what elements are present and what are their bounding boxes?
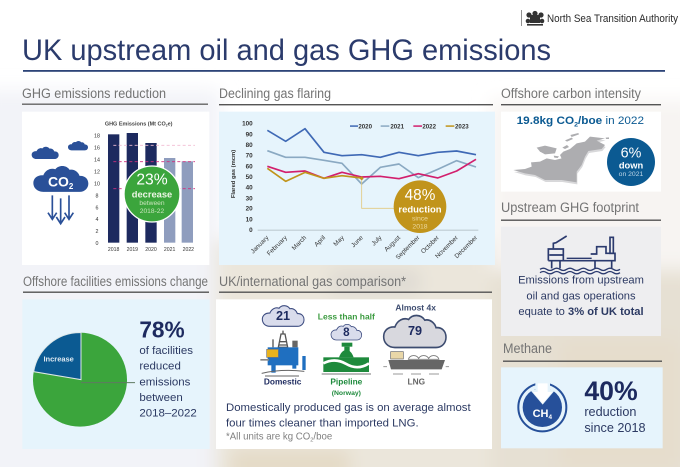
line chart: flared gas (231, 121, 479, 261)
footnote: *All units are kg CO (226, 432, 310, 443)
icon: offshore platform (540, 236, 620, 274)
callout: 6% down: down (619, 160, 643, 170)
icon: CO2 cloud with arrows (33, 166, 88, 224)
bar chart: GHG emissions: 12 (94, 169, 100, 175)
domestic column (260, 306, 306, 387)
icon: small clouds (32, 141, 88, 159)
text: footprint statement: Emissions from upstream (518, 274, 644, 286)
callout: 48% reduction: since (412, 216, 428, 223)
stat: 40% reduction: reduction (584, 405, 636, 419)
callout: 23% decrease (124, 166, 180, 222)
LNG column: LNG (408, 377, 425, 387)
icon: oil rig (260, 331, 306, 376)
panel: Upstream GHG footprint (501, 227, 661, 336)
stat: 40% reduction: 40% (584, 376, 638, 406)
panel: Methane (501, 367, 663, 448)
pipeline column: Less than half (318, 312, 375, 322)
bar chart: GHG emissions: 2 (166, 124, 168, 128)
icon: CO2 cloud with arrows: 2 (69, 182, 74, 191)
callout: 48% reduction: reduction (398, 204, 442, 215)
callout: 48% reduction: 48% (405, 187, 436, 204)
panel: Offshore facilities emissions change (22, 299, 210, 449)
line chart: flared gas: May (332, 234, 346, 248)
heading: Offshore carbon intensity: Offshore carbon intensity (501, 86, 642, 102)
panel: UK/international gas comparison (216, 299, 492, 449)
callout: 23% decrease: decrease (132, 190, 172, 200)
bar chart: GHG emissions: GHG Emissions (Mt CO (105, 122, 166, 128)
callout: 23% decrease: 2018-22 (140, 208, 165, 215)
stat: 78% (139, 317, 197, 420)
icon: CO2 cloud with arrows: CO (48, 173, 69, 189)
title: UK upstream oil and gas GHG emissions (22, 34, 551, 67)
bar chart: GHG emissions: 6 (96, 205, 99, 211)
stat: 78%: emissions (139, 376, 191, 388)
callout: 6% down: on 2021 (619, 171, 644, 178)
LNG column: 79 (408, 324, 422, 338)
line chart: flared gas: December (453, 234, 479, 260)
heading: Methane: Methane (503, 341, 552, 357)
bar chart: GHG emissions: 10 (94, 181, 100, 187)
legend (350, 123, 469, 130)
pipeline column: 8 (343, 326, 350, 339)
heading: Declining gas flaring: Declining gas flaring (219, 86, 331, 102)
stat: 78%: of facilities (139, 345, 193, 357)
stat: 78%: reduced (139, 361, 181, 373)
bar chart: GHG emissions: 2019 (127, 247, 138, 253)
icon: CH4 down arrow: CH (533, 408, 549, 420)
line chart: flared gas: 20 (246, 206, 253, 213)
footnote: 2 (310, 438, 313, 444)
line chart: flared gas: August (383, 234, 402, 253)
domestic column: Domestic (264, 377, 302, 387)
callout: 23% decrease: 23% (136, 171, 168, 188)
panel: Declining gas flaring (219, 112, 495, 265)
callout: 23% decrease: between (139, 200, 165, 207)
stat: carbon intensity: 2 (574, 121, 578, 128)
line chart: flared gas: 40 (246, 185, 253, 192)
LNG column (383, 303, 449, 387)
text: footprint statement: oil and gas operations (526, 290, 636, 302)
footnote: /boe (313, 432, 332, 443)
bar chart: GHG emissions: 2018 (108, 247, 120, 253)
pie chart: facilities: Increase (43, 355, 74, 364)
callout: 48% reduction (394, 180, 446, 233)
stat: 78%: between (139, 392, 183, 404)
text: comparison statement: four times cleaner than imported LNG. (226, 417, 419, 429)
icon: CH4 down arrow (518, 381, 566, 431)
heading: Offshore facilities emissions change: Offshore facilities emissions change (23, 274, 208, 290)
bar chart: GHG emissions: 4 (96, 217, 99, 223)
stat: 78%: 2018–2022 (139, 408, 197, 420)
bar chart: GHG emissions: 8 (96, 193, 99, 199)
icon: royal crest (526, 11, 544, 26)
legend: 2020 (358, 123, 373, 130)
line chart: flared gas: April (313, 234, 327, 248)
heading: Upstream GHG footprint: Upstream GHG footprint (501, 200, 639, 216)
line chart: flared gas: 0 (249, 227, 253, 234)
line chart: flared gas: October (420, 234, 441, 255)
bar chart: GHG emissions: 0 (96, 241, 99, 247)
pie chart: facilities (33, 333, 135, 427)
callout: 6% down: 6% (621, 145, 642, 161)
legend: 2023 (455, 123, 469, 130)
bar chart: GHG emissions: 2020 (145, 247, 157, 253)
line chart: flared gas: 100 (242, 121, 253, 128)
panel: Offshore carbon intensity (501, 112, 661, 192)
line chart: flared gas: November (434, 234, 460, 260)
line chart: flared gas: 50 (246, 174, 253, 181)
line chart: flared gas: Flared gas (mcm) (231, 150, 237, 198)
text: footprint statement: equate to 3% of UK total (518, 306, 644, 318)
pipeline column: (Norway) (332, 390, 361, 397)
line chart: flared gas: 90 (246, 131, 253, 138)
line chart: flared gas: January (250, 234, 271, 255)
bar chart: GHG emissions: 2 (96, 229, 99, 235)
line chart: flared gas: July (370, 234, 384, 247)
text: footprint statement (518, 274, 644, 318)
callout: 48% reduction: 2018 (412, 224, 428, 231)
line chart: flared gas: September (395, 234, 421, 261)
icon: LNG tanker (383, 352, 449, 374)
stat: 40% reduction (584, 376, 646, 435)
stat: 40% reduction: since 2018 (584, 421, 646, 435)
panel: GHG emissions reduction (22, 112, 209, 265)
stat: carbon intensity: 19.8kg CO (517, 115, 602, 128)
bar chart: GHG emissions: 2021 (164, 247, 176, 253)
heading: UK/international gas comparison: UK/international gas comparison* (219, 274, 406, 290)
LNG column: Almost 4x (395, 303, 436, 313)
bar chart: GHG emissions: 18 (94, 134, 100, 140)
line chart: flared gas: February (266, 234, 289, 257)
line chart: flared gas: 30 (246, 195, 253, 202)
map: UK (513, 133, 609, 184)
bar chart: GHG emissions: 2022 (183, 247, 194, 253)
text: comparison statement (226, 402, 471, 429)
legend: 2021 (390, 123, 405, 130)
line chart: flared gas: 70 (246, 153, 253, 160)
line chart: flared gas: June (350, 234, 365, 249)
line chart: flared gas: March (291, 234, 308, 252)
bar chart: GHG emissions: 14 (94, 158, 100, 164)
pipeline column: Pipeline (330, 376, 363, 386)
heading: GHG emissions reduction: GHG emissions reduction (22, 86, 166, 102)
stat: 78%: 78% (139, 317, 185, 343)
icon: pipeline valve (322, 343, 371, 374)
text: comparison statement: Domestically produced gas is on average almost (226, 402, 471, 414)
bar chart: GHG emissions: 16 (94, 146, 100, 152)
stat: carbon intensity: /boe (578, 115, 602, 127)
logo: North Sea Transition Authority (521, 10, 679, 26)
domestic column: 21 (276, 309, 290, 323)
bar chart: GHG emissions: e) (168, 122, 173, 128)
icon: CH4 down arrow: 4 (549, 414, 553, 421)
legend: 2022 (422, 123, 437, 130)
pipeline column (318, 312, 375, 397)
bar chart: GHG emissions (94, 122, 195, 253)
callout: 6% down (607, 138, 655, 186)
line chart: flared gas: 60 (246, 163, 253, 170)
line chart: flared gas: 80 (246, 142, 253, 149)
stat: carbon intensity: in 2022 (605, 115, 641, 127)
line chart: flared gas: 10 (246, 216, 253, 223)
